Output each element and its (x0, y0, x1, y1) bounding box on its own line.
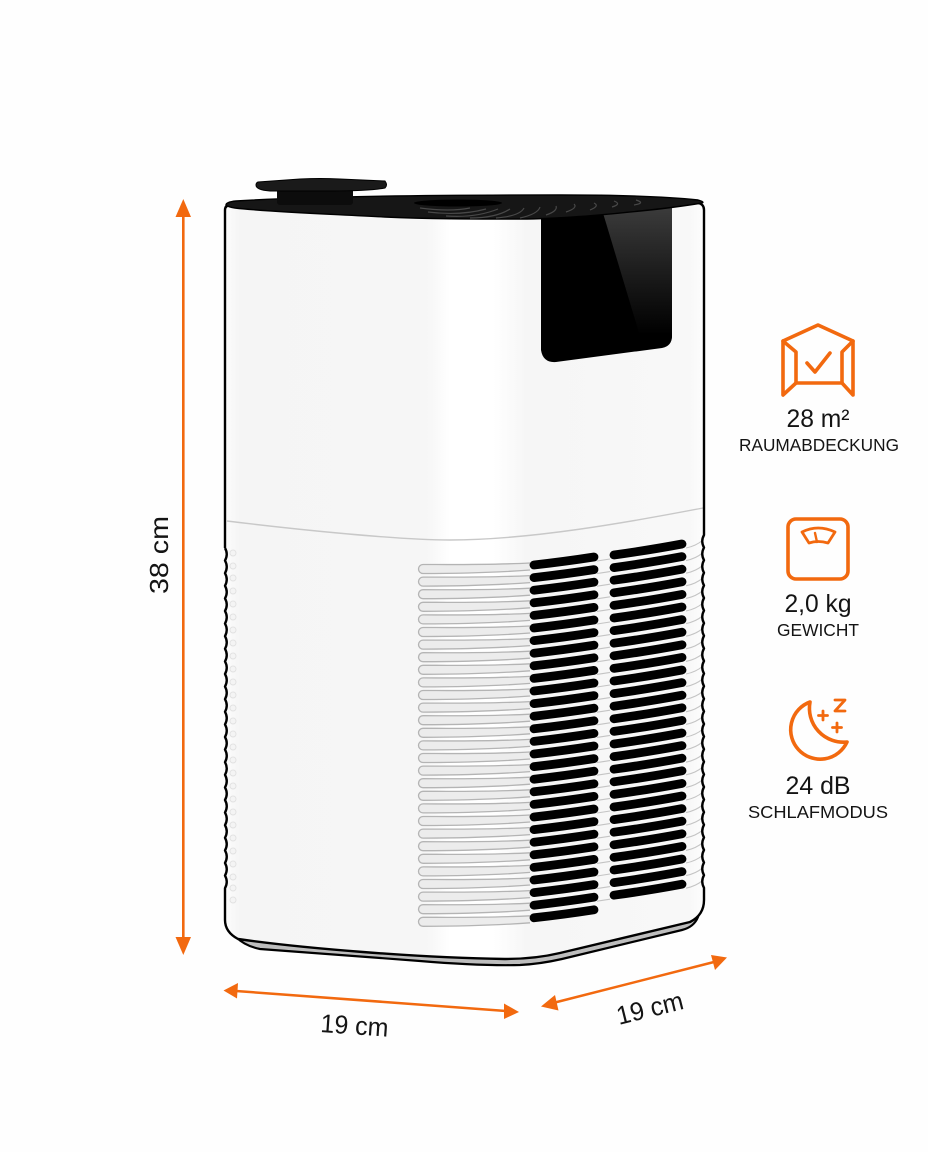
height arrow (176, 199, 191, 955)
spec: sleep mode (748, 700, 888, 822)
top knob (256, 178, 386, 205)
value: 2,0 kg (784, 590, 852, 618)
housing seam (227, 508, 703, 540)
display panel (541, 207, 672, 362)
width arrow front (224, 983, 519, 1019)
right slot column (614, 544, 682, 895)
grille ribs (418, 563, 530, 926)
rib lines between slots (597, 540, 703, 901)
housing body (225, 203, 704, 959)
depth arrow side (541, 955, 727, 1010)
label: SCHLAFMODUS (748, 802, 888, 822)
label: GEWICHT (777, 620, 859, 640)
value: 28 m² (786, 405, 850, 433)
left side ribs (230, 550, 236, 903)
display reflection (603, 207, 672, 344)
lid vent fan (414, 200, 641, 218)
top lid (226, 195, 703, 219)
air purifier illustration (225, 178, 704, 965)
label: RAUMABDECKUNG (739, 435, 899, 455)
width label front: 19 cm (320, 1008, 390, 1043)
height label: 38 cm (144, 516, 174, 594)
knob cap (256, 178, 386, 191)
icon: house with check (783, 325, 853, 395)
left slot column (534, 557, 594, 918)
housing outline (225, 203, 704, 959)
depth label side: 19 cm (613, 985, 686, 1031)
spec: room coverage (739, 325, 899, 455)
base strip (236, 917, 698, 965)
icon: moon and stars (791, 700, 847, 759)
value: 24 dB (786, 772, 850, 800)
icon: scale (788, 519, 848, 579)
knob stem (277, 188, 353, 205)
spec: weight (777, 519, 859, 640)
